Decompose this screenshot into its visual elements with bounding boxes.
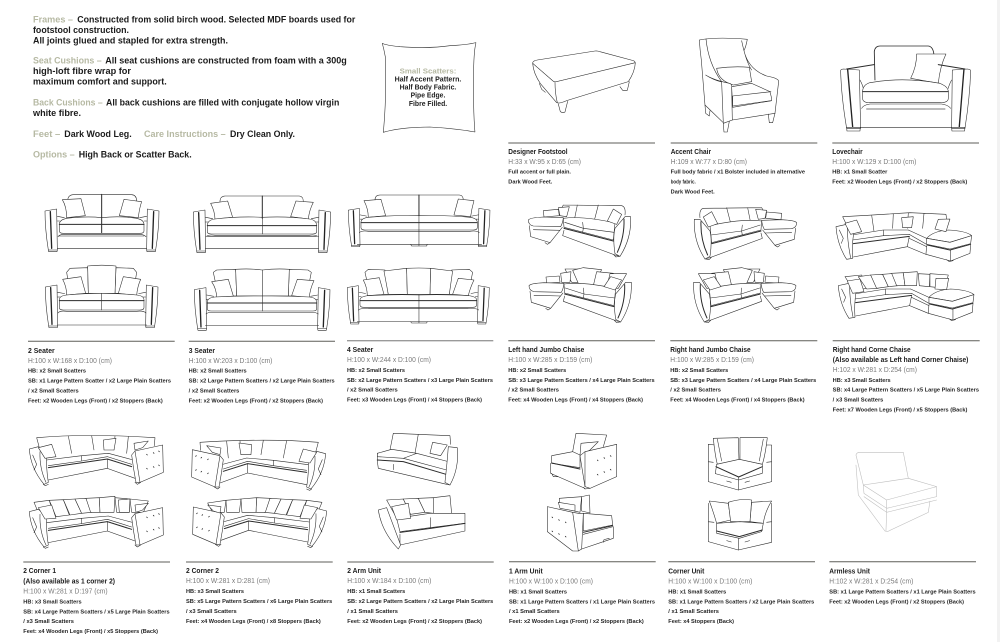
panel: Armless Unit: Feet: x2 Wooden Legs (Front) / x2 Stoppers (Back) bbox=[829, 599, 964, 605]
panel: 2 Seater: / x2 Small Scatters bbox=[28, 389, 79, 395]
icon: right chaise scatter back bbox=[694, 268, 796, 323]
panel: 1 Arm Unit bbox=[509, 433, 656, 625]
panel: 4 Seater bbox=[347, 195, 493, 404]
panel: 1 Arm Unit: 1 Arm Unit bbox=[509, 568, 543, 576]
panel: small scatter cushion bbox=[382, 43, 476, 132]
panel: Left hand Jumbo Chaise: SB: x3 Large Pattern Scatters / x4 Large Plain Scatters bbox=[508, 378, 655, 384]
panel: Left hand Jumbo Chaise: H:100 x W:285 x D:159 (cm) bbox=[508, 357, 592, 364]
panel: Right hand Jumbo Chaise: SB: x3 Large Pattern Scatters / x4 Large Plain Scatters bbox=[670, 378, 816, 384]
panel: 3 Seater: HB: x2 Small Scatters bbox=[189, 369, 247, 375]
icon: corner 1 high back bbox=[29, 435, 163, 486]
panel: Right hand Jumbo Chaise: Right hand Jumbo Chaise bbox=[670, 347, 751, 354]
panel: Right hand Corner Chaise: HB: x3 Small Scatters bbox=[833, 378, 891, 384]
text block: construction specifications: All back cushions are filled with conjugate hollow virgin bbox=[106, 97, 339, 108]
icon: corner unit high back bbox=[708, 438, 772, 490]
panel: 1 Arm Unit: / x1 Small Scatters bbox=[509, 609, 560, 615]
panel: 2 Corner 1: HB: x3 Small Scatters bbox=[23, 599, 82, 605]
panel: small scatter cushion: Small Scatters: bbox=[400, 66, 456, 75]
panel: 2 Arm Unit: Feet: x2 Wooden Legs (Front) / x2 Stoppers (Back) bbox=[347, 619, 482, 625]
text block: construction specifications: Dry Clean Only. bbox=[230, 129, 295, 140]
panel: 2 Arm Unit bbox=[347, 433, 494, 625]
text block: construction specifications: Dark Wood Leg. bbox=[64, 129, 132, 140]
text block: construction specifications: High Back or Scatter Back. bbox=[79, 150, 192, 161]
icon: armless unit bbox=[856, 452, 937, 532]
panel: Right hand Corner Chaise: Feet: x7 Wooden Legs (Front) / x5 Stoppers (Back) bbox=[833, 408, 968, 414]
icon: 3 seater scatter back bbox=[194, 269, 330, 330]
panel: 3 Seater: SB: x2 Large Pattern Scatters / x2 Large Plain Scatters bbox=[189, 379, 335, 385]
panel: small scatter cushion: Half Body Fabric. bbox=[400, 85, 456, 92]
icon: footstool bbox=[533, 51, 635, 113]
panel: Right hand Jumbo Chaise: / x2 Small Scatters bbox=[670, 388, 721, 394]
panel: 2 Corner 1: SB: x4 Large Pattern Scatters / x5 Large Plain Scatters bbox=[23, 609, 170, 615]
panel: Accent Chair: Full body fabric / x1 Bolster included in alternative bbox=[671, 170, 805, 176]
panel: small scatter cushion: Fibre Filled. bbox=[409, 101, 447, 108]
icon: accent chair bbox=[699, 38, 779, 132]
panel: Right hand Corner Chaise: (Also available as Left hand Corner Chaise) bbox=[833, 357, 968, 364]
text block: construction specifications: footstool construction. bbox=[33, 25, 129, 36]
icon: 2 seater scatter back bbox=[45, 265, 158, 328]
panel: Corner Unit bbox=[668, 438, 815, 625]
panel: 2 Seater bbox=[28, 194, 175, 405]
text block: construction specifications: high-loft fibre wrap for bbox=[33, 66, 131, 77]
panel: 2 Corner 1: Feet: x4 Wooden Legs (Front) / x5 Stoppers (Back) bbox=[23, 629, 158, 635]
icon: 2 seater high back bbox=[45, 194, 159, 252]
icon: left chaise scatter back bbox=[529, 268, 631, 323]
panel: 2 Seater: 2 Seater bbox=[28, 348, 55, 355]
panel: Accent Chair: H:109 x W:77 x D:80 (cm) bbox=[671, 159, 747, 166]
panel: Right hand Jumbo Chaise bbox=[670, 208, 817, 404]
panel: 2 Seater: SB: x1 Large Pattern Scatter / x2 Large Plain Scatters bbox=[28, 379, 171, 385]
panel: Right hand Corner Chaise: Right hand Corne Chaise bbox=[833, 347, 911, 354]
panel: 4 Seater: / x2 Small Scatters bbox=[347, 388, 398, 394]
text block: construction specifications: All seat cushions are constructed from foam with a 300g bbox=[105, 56, 347, 67]
panel: Accent Chair: Dark Wood Feet. bbox=[671, 190, 715, 196]
panel: 2 Arm Unit: H:100 x W:184 x D:100 (cm) bbox=[347, 578, 431, 585]
text block: construction specifications: Care Instructions – bbox=[144, 129, 226, 140]
icon: corner unit scatter back bbox=[708, 500, 772, 550]
panel: Accent Chair: body fabric. bbox=[671, 180, 696, 186]
panel: Designer Footstool: Designer Footstool bbox=[508, 149, 568, 156]
panel: Left hand Jumbo Chaise: HB: x2 Small Scatters bbox=[508, 368, 566, 374]
panel: 2 Corner 2: / x3 Small Scatters bbox=[186, 609, 237, 615]
icon: left chaise high back bbox=[528, 205, 631, 257]
panel: 2 Corner 1: 2 Corner 1 bbox=[23, 568, 56, 575]
panel: Lovechair: H:100 x W:129 x D:100 (cm) bbox=[832, 159, 916, 166]
panel: 2 Corner 2: Feet: x4 Wooden Legs (Front) / x8 Stoppers (Back) bbox=[186, 619, 321, 625]
panel: small scatter cushion: Pipe Edge. bbox=[411, 93, 445, 100]
text block: construction specifications: white fibre. bbox=[32, 108, 81, 119]
panel: Lovechair bbox=[832, 46, 979, 186]
panel: 3 Seater bbox=[189, 196, 335, 405]
panel: Armless Unit: H:102 x W:281 x D:254 (cm) bbox=[829, 578, 913, 586]
panel: Armless Unit: SB: x1 Large Pattern Scatters / x1 Large Plain Scatters bbox=[829, 589, 976, 595]
panel: 2 Corner 2: 2 Corner 2 bbox=[186, 568, 219, 575]
panel: Right hand Corner Chaise bbox=[833, 213, 980, 414]
icon: scatter cushion outline bbox=[382, 43, 476, 132]
panel: Lovechair: Feet: x2 Wooden Legs (Front) / x2 Stoppers (Back) bbox=[832, 180, 968, 186]
panel: 1 Arm Unit: H:100 x W:100 x D:100 (cm) bbox=[509, 578, 593, 586]
panel: Right hand Jumbo Chaise: H:100 x W:285 x D:159 (cm) bbox=[670, 357, 754, 364]
panel: Right hand Jumbo Chaise: HB: x2 Small Scatters bbox=[670, 368, 728, 374]
panel: 2 Corner 2: HB: x3 Small Scatters bbox=[186, 589, 244, 595]
icon: corner 1 scatter back bbox=[29, 496, 163, 548]
panel: 3 Seater: H:100 x W:203 x D:100 (cm) bbox=[189, 358, 272, 365]
icon: right chaise high back bbox=[694, 208, 797, 260]
panel: 3 Seater: / x2 Small Scatters bbox=[189, 389, 239, 395]
panel: 4 Seater: HB: x2 Small Scatters bbox=[347, 368, 405, 374]
text block: construction specifications: All joints glued and stapled for extra strength. bbox=[33, 35, 228, 46]
panel: Right hand Corner Chaise: SB: x4 Large Pattern Scatters / x5 Large Plain Scatters bbox=[833, 388, 979, 394]
panel: 1 Arm Unit: Feet: x2 Wooden Legs (Front) / x2 Stoppers (Back) bbox=[509, 619, 644, 625]
text block: construction specifications: Back Cushions – bbox=[33, 97, 103, 108]
panel: 2 Arm Unit: 2 Arm Unit bbox=[347, 568, 382, 575]
panel: 2 Corner 2: SB: x5 Large Pattern Scatters / x6 Large Plain Scatters bbox=[186, 599, 332, 605]
panel: 2 Corner 1: (Also available as 1 corner 2) bbox=[23, 578, 115, 586]
text block: construction specifications: Feet – bbox=[33, 129, 61, 140]
panel: Corner Unit: / x1 Small Scatters bbox=[668, 609, 719, 615]
panel: Lovechair: HB: x1 Small Scatter bbox=[832, 170, 887, 176]
icon: 4 seater high back bbox=[348, 195, 490, 247]
text block: construction specifications: Options – bbox=[33, 150, 75, 161]
panel: Left hand Jumbo Chaise bbox=[508, 205, 655, 404]
panel: Right hand Corner Chaise: H:102 x W:281 x D:254 (cm) bbox=[833, 367, 917, 374]
icon: corner chaise high back bbox=[836, 213, 972, 262]
icon: 4 seater scatter back bbox=[347, 268, 489, 324]
panel: 2 Corner 2 bbox=[186, 440, 333, 625]
text block: construction specifications: Seat Cushions – bbox=[33, 56, 102, 67]
panel: Right hand Corner Chaise: / x3 Small Scatters bbox=[833, 398, 883, 404]
panel: 1 Arm Unit: HB: x1 Small Scatters bbox=[509, 589, 567, 595]
panel: small scatter cushion: Half Accent Pattern. bbox=[395, 77, 461, 84]
icon: 2 arm unit high back bbox=[377, 433, 458, 485]
panel: Corner Unit: Feet: x4 Stoppers (Back) bbox=[668, 619, 734, 625]
panel: Corner Unit: SB: x1 Large Pattern Scatters / x2 Large Plain Scatters bbox=[668, 599, 814, 605]
panel: Accent Chair: Accent Chair bbox=[671, 149, 711, 156]
panel: Armless Unit: Armless Unit bbox=[829, 568, 871, 576]
panel: Designer Footstool: Dark Wood Feet. bbox=[508, 180, 553, 186]
panel: 2 Seater: HB: x2 Small Scatters bbox=[28, 369, 86, 375]
panel: Armless Unit bbox=[829, 452, 976, 605]
icon: 1 arm unit scatter back bbox=[547, 495, 613, 551]
text block: construction specifications: maximum comfort and support. bbox=[33, 77, 167, 88]
panel: 2 Arm Unit: HB: x1 Small Scatters bbox=[347, 589, 405, 595]
panel: Right hand Jumbo Chaise: Feet: x4 Wooden Legs (Front) / x4 Stoppers (Back) bbox=[670, 398, 805, 404]
icon: corner chaise scatter back bbox=[838, 272, 974, 321]
panel: 2 Arm Unit: SB: x2 Large Pattern Scatters / x2 Large Plain Scatters bbox=[347, 599, 493, 605]
icon: corner 2 scatter back bbox=[193, 498, 327, 548]
panel: Corner Unit: HB: x1 Small Scatters bbox=[668, 589, 726, 595]
panel: 2 Seater: Feet: x2 Wooden Legs (Front) / x2 Stoppers (Back) bbox=[28, 399, 163, 405]
panel: Left hand Jumbo Chaise: / x2 Small Scatters bbox=[508, 388, 559, 394]
panel: 2 Arm Unit: / x1 Small Scatters bbox=[347, 609, 398, 615]
panel: 2 Corner 2: H:100 x W:281 x D:281 (cm) bbox=[186, 578, 270, 585]
panel: Designer Footstool: H:33 x W:95 x D:65 (cm) bbox=[508, 159, 581, 166]
text block: construction specifications bbox=[32, 14, 356, 161]
panel: 2 Corner 1: / x3 Small Scatters bbox=[23, 619, 74, 625]
panel: 2 Corner 1 bbox=[23, 435, 170, 635]
panel: 3 Seater: Feet: x2 Wooden Legs (Front) / x2 Stoppers (Back) bbox=[189, 399, 323, 405]
panel: 4 Seater: Feet: x3 Wooden Legs (Front) / x4 Stoppers (Back) bbox=[347, 398, 482, 404]
panel: 4 Seater: H:100 x W:244 x D:100 (cm) bbox=[347, 357, 431, 364]
panel: Left hand Jumbo Chaise: Left hand Jumbo Chaise bbox=[508, 347, 584, 354]
icon: 2 arm unit scatter back bbox=[378, 496, 465, 549]
icon: corner 2 high back bbox=[192, 440, 326, 490]
panel: Designer Footstool: Full accent or full plain. bbox=[508, 170, 572, 176]
icon: 1 arm unit high back bbox=[551, 433, 617, 489]
panel: 2 Corner 1: H:100 x W:281 x D:197 (cm) bbox=[23, 588, 108, 596]
panel: Designer Footstool bbox=[508, 51, 655, 186]
panel: 2 Seater: H:100 x W:168 x D:100 (cm) bbox=[28, 358, 112, 365]
panel: Corner Unit: H:100 x W:100 x D:100 (cm) bbox=[668, 578, 752, 586]
text block: construction specifications: Frames – bbox=[33, 14, 74, 26]
text block: construction specifications: Constructed from solid birch wood. Selected MDF boards used for bbox=[77, 14, 356, 26]
panel: 4 Seater: 4 Seater bbox=[347, 347, 374, 354]
panel: Lovechair: Lovechair bbox=[832, 149, 863, 156]
panel: Accent Chair bbox=[671, 38, 817, 196]
panel: 3 Seater: 3 Seater bbox=[189, 348, 215, 355]
panel: 4 Seater: SB: x2 Large Pattern Scatters / x3 Large Plain Scatters bbox=[347, 378, 493, 384]
panel: Corner Unit: Corner Unit bbox=[668, 568, 705, 576]
panel: 1 Arm Unit: SB: x1 Large Pattern Scatters / x1 Large Plain Scatters bbox=[509, 599, 655, 605]
icon: 3 seater high back bbox=[193, 196, 331, 253]
icon: lovechair bbox=[841, 46, 971, 131]
panel: Left hand Jumbo Chaise: Feet: x4 Wooden Legs (Front) / x4 Stoppers (Back) bbox=[508, 398, 643, 404]
